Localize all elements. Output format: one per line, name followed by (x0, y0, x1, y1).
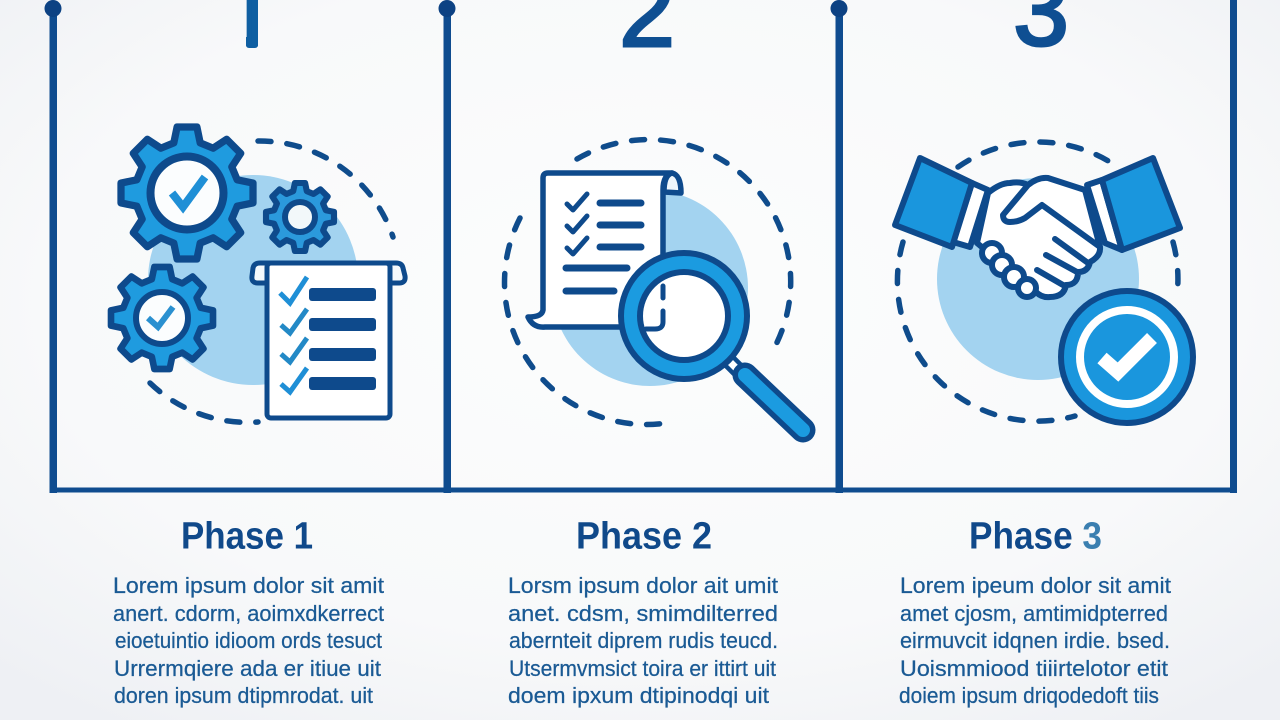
text block: phase 3 description (899, 573, 1171, 708)
light blue circle (937, 178, 1139, 380)
icon: document with checklist (528, 173, 681, 327)
icon: small gear (266, 183, 334, 251)
icon: check badge (1061, 291, 1193, 423)
text block: phase 3 description: eirmuvcit idqnen irdie. bsed. (900, 628, 1170, 653)
text block: phase 2 description: doem ipxum dtipinodqi uit (508, 683, 769, 708)
text block: phase 3 description: amet cjosm, amtimidpterred (900, 601, 1168, 626)
text block: phase 1 description: Urrermqiere ada er itiue uit (114, 656, 381, 681)
icon: left cuff (895, 158, 988, 247)
icon: magnifying glass (621, 253, 803, 430)
text block: phase 3 description: Uoismmiood tiiirtelotor etit (900, 656, 1168, 681)
heading: phase 1: Phase 1 (181, 516, 313, 558)
text block: phase 1 description: anert. cdorm, aoimxdkerrect (113, 601, 384, 626)
dashed orbit (897, 142, 1178, 421)
text block: phase 2 description: abernteit diprem rudis teucd. (509, 628, 778, 653)
icon: handshake (977, 178, 1100, 297)
three-column frame (44, 0, 1237, 493)
panel: phase 1 illustration (111, 127, 405, 422)
icon: checklist clipboard (252, 263, 405, 418)
heading: phase 3: Phase 3 (969, 516, 1102, 558)
heading: phase 2: Phase 2 (576, 516, 712, 558)
text block: phase 2 description (508, 573, 778, 708)
text block: phase 1 description (113, 573, 384, 708)
panel: phase 3 illustration (895, 142, 1193, 423)
text block: phase 2 description: anet. cdsm, smimdilterred (508, 601, 778, 626)
text block: phase 3 description: Lorem ipeum dolor sit amit (900, 573, 1171, 598)
light blue circle (552, 190, 748, 386)
text block: phase 1 description: eioetuintio idioom ords tesuct (115, 628, 382, 653)
light blue circle (148, 175, 358, 385)
dashed orbit (150, 141, 393, 422)
panel: phase 2 illustration (505, 140, 803, 430)
text block: phase 1 description: Lorem ipsum dolor sit amit (113, 573, 384, 598)
text block: phase 1 description: doren ipsum dtipmrodat. uit (114, 683, 373, 708)
icon: large gear with check (121, 127, 253, 259)
dashed orbit (505, 140, 791, 424)
text block: phase 2 description: Lorsm ipsum dolor ait umit (508, 573, 778, 598)
text block: phase 3 description: doiem ipsum driqodedoft tiis (899, 683, 1159, 708)
icon: right cuff (1087, 158, 1180, 250)
text block: phase 2 description: Utsermvmsict toira er ittirt uit (509, 656, 776, 681)
icon: medium gear with check (111, 267, 213, 369)
